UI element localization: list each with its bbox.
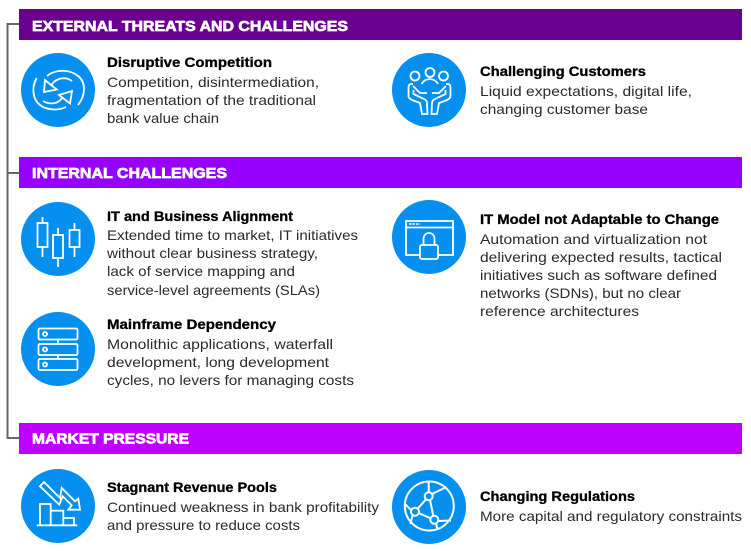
text: challenging customers: [480, 64, 692, 117]
heading: external threats: EXTERNAL THREATS AND CHALLENGES: [32, 18, 348, 35]
text: changing regulations: Changing Regulations: [480, 489, 635, 504]
text: stagnant revenue pools: [107, 480, 379, 533]
text: disruptive competition: bank value chain: [107, 110, 219, 126]
text: disruptive competition: [107, 55, 319, 126]
heading: market pressure: [19, 423, 742, 454]
panel: internal challenges: [19, 157, 742, 388]
text: stagnant revenue pools: Stagnant Revenue Pools: [107, 480, 277, 495]
text: disruptive competition: fragmentation of the traditional: [107, 92, 316, 108]
text: IT and business alignment: without clear business strategy,: [106, 245, 318, 261]
text: mainframe dependency: Mainframe Dependency: [107, 317, 277, 332]
text: mainframe dependency: Monolithic applications, waterfall: [107, 336, 333, 352]
text: IT and business alignment: IT and Business Alignment: [107, 209, 294, 224]
text: mainframe dependency: [107, 317, 354, 388]
text: IT and business alignment: [106, 209, 358, 298]
text: disruptive competition: Disruptive Competition: [107, 55, 272, 70]
panel: market pressure: [19, 423, 742, 544]
text: IT and business alignment: service-level agreements (SLAs): [107, 282, 320, 298]
icon: server stack: [21, 312, 95, 386]
icon: challenging customers: [392, 53, 466, 127]
text: IT model not adaptable: networks (SDNs), but no clear: [480, 285, 681, 301]
icon: locked window: [392, 200, 466, 274]
icon: candlestick chart: [21, 202, 95, 276]
text: stagnant revenue pools: and pressure to reduce costs: [107, 517, 300, 533]
text: IT model not adaptable: initiatives such as software defined: [480, 267, 717, 283]
text: IT model not adaptable: [480, 212, 722, 319]
text: IT model not adaptable: reference architectures: [480, 303, 639, 319]
text: challenging customers: Liquid expectations, digital life,: [480, 83, 692, 99]
heading: market pressure: MARKET PRESSURE: [32, 430, 189, 448]
icon: disruptive competition: [21, 53, 95, 127]
text: IT model not adaptable: IT Model not Adaptable to Change: [480, 212, 720, 227]
text: stagnant revenue pools: Continued weakness in bank profitability: [107, 499, 379, 515]
connector bracket: [8, 24, 19, 438]
text: disruptive competition: Competition, disintermediation,: [107, 74, 319, 90]
heading: internal challenges: [19, 157, 742, 188]
text: IT and business alignment: lack of service mapping and: [107, 263, 295, 279]
text: challenging customers: Challenging Customers: [480, 64, 646, 79]
heading: internal challenges: INTERNAL CHALLENGES: [32, 165, 227, 182]
text: changing regulations: [480, 489, 742, 524]
text: mainframe dependency: cycles, no levers for managing costs: [107, 372, 354, 388]
icon: declining bars: [21, 469, 95, 543]
heading: external threats: [19, 9, 742, 40]
text: IT model not adaptable: Automation and virtualization not: [480, 231, 707, 247]
text: changing regulations: More capital and regulatory constraints: [480, 508, 742, 524]
text: IT and business alignment: Extended time to market, IT initiatives: [107, 227, 358, 243]
icon: network globe: [392, 470, 466, 544]
panel: external threats and challenges: [19, 9, 742, 127]
text: challenging customers: changing customer base: [480, 101, 648, 117]
text: mainframe dependency: development, long development: [107, 354, 329, 370]
text: IT model not adaptable: delivering expected results, tactical: [480, 249, 722, 265]
